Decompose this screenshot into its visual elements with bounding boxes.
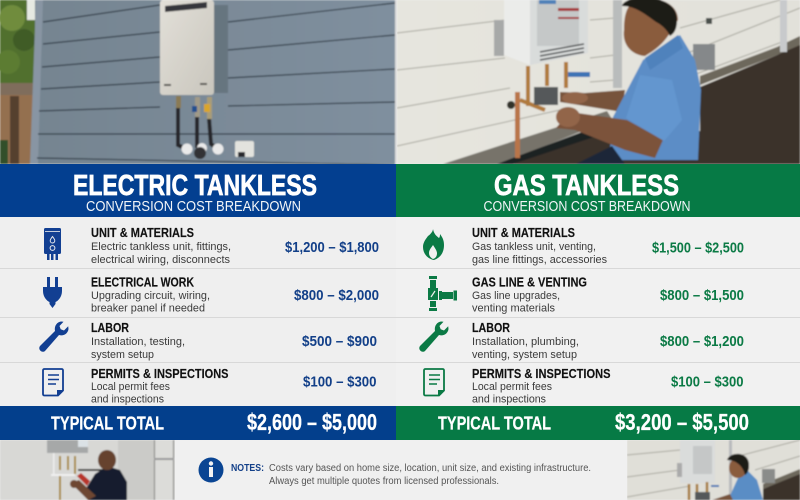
row: gas labor: $800 – $1,200 bbox=[660, 333, 744, 350]
row: electrical work bbox=[0, 269, 396, 317]
row: gas labor bbox=[396, 318, 800, 362]
icon: electric plug bbox=[43, 277, 62, 308]
row: gas line and venting bbox=[396, 269, 800, 317]
icon: gas permit document bbox=[424, 369, 444, 396]
photo: technician working on gas tankless unit bbox=[397, 0, 800, 164]
row: labor: $500 – $900 bbox=[302, 333, 377, 350]
row: permits and inspections bbox=[0, 363, 396, 406]
photo: technician indoors bbox=[0, 440, 175, 500]
row: gas unit and materials: UNIT & MATERIALS bbox=[472, 225, 575, 240]
row: gas line and venting: $800 – $1,500 bbox=[660, 287, 744, 304]
sleeve bbox=[626, 75, 682, 141]
row: labor: LABOR bbox=[91, 320, 130, 335]
icon: flame bbox=[423, 229, 444, 260]
notes text: NOTES: bbox=[231, 463, 264, 474]
row: electrical work: $800 – $2,000 bbox=[294, 287, 379, 304]
ground band under wall bbox=[443, 111, 612, 164]
row: gas labor: venting, system setup bbox=[472, 349, 577, 361]
row: gas unit and materials: gas line fittings, accessories bbox=[472, 254, 607, 266]
total bar: electric: $2,600 – $5,000 bbox=[247, 409, 377, 435]
row: gas permits and inspections: Local permit fees bbox=[472, 381, 552, 393]
row: gas line and venting: Gas line upgrades, bbox=[472, 290, 560, 302]
lower forearm and hand bbox=[556, 112, 663, 158]
row: unit and materials: UNIT & MATERIALS bbox=[91, 225, 194, 240]
shirt body bbox=[610, 35, 701, 160]
icon: info circle bbox=[198, 458, 224, 482]
notes text bbox=[231, 463, 591, 487]
heading: gas tankless: CONVERSION COST BREAKDOWN bbox=[484, 199, 690, 215]
total bar: electric bbox=[0, 406, 396, 440]
row: unit and materials: electrical wiring, disconnects bbox=[91, 254, 230, 266]
photo: electric tankless unit on siding bbox=[0, 0, 397, 165]
row: electrical work: breaker panel if needed bbox=[91, 302, 205, 314]
row: electrical work: ELECTRICAL WORK bbox=[91, 274, 194, 290]
row: unit and materials bbox=[0, 217, 396, 268]
row: labor: system setup bbox=[91, 349, 154, 361]
row: gas labor: Installation, plumbing, bbox=[472, 336, 579, 348]
icon: permit document bbox=[43, 369, 63, 396]
row: electrical work: Upgrading circuit, wiring, bbox=[91, 290, 210, 302]
row: gas unit and materials: Gas tankless unit, venting, bbox=[472, 241, 596, 253]
notes text: Always get multiple quotes from licensed professionals. bbox=[269, 476, 499, 487]
row: gas unit and materials bbox=[396, 217, 800, 268]
icon: gas pipe fitting bbox=[428, 276, 457, 311]
row: labor: Installation, testing, bbox=[91, 336, 185, 348]
panel: electric column bbox=[0, 164, 396, 440]
row: gas line and venting: GAS LINE & VENTING bbox=[472, 274, 587, 290]
heading: electric tankless bbox=[0, 164, 396, 217]
row: gas permits and inspections: PERMITS & INSPECTIONS bbox=[472, 366, 611, 381]
icon: wrench bbox=[39, 322, 68, 352]
icon: gas wrench bbox=[419, 322, 448, 352]
heading: electric tankless: ELECTRIC TANKLESS bbox=[73, 170, 317, 202]
row: permits and inspections: Local permit fees bbox=[91, 381, 170, 393]
row dividers bbox=[0, 268, 800, 362]
heading: gas tankless bbox=[396, 164, 800, 217]
icon: water heater bbox=[44, 228, 61, 260]
heading: electric tankless: CONVERSION COST BREAKDOWN bbox=[86, 199, 301, 215]
total bar: gas bbox=[396, 406, 800, 440]
row: gas labor: LABOR bbox=[472, 320, 511, 335]
row: labor bbox=[0, 318, 396, 362]
total bar: electric: TYPICAL TOTAL bbox=[51, 412, 164, 434]
row: gas permits and inspections: and inspections bbox=[472, 394, 546, 406]
row: permits and inspections: $100 – $300 bbox=[303, 374, 376, 390]
photo: technician outdoors small bbox=[627, 440, 800, 500]
row: gas permits and inspections: $100 – $300 bbox=[671, 374, 744, 390]
row: unit and materials: Electric tankless unit, fittings, bbox=[91, 241, 231, 253]
row: gas unit and materials: $1,500 – $2,500 bbox=[652, 240, 744, 256]
notes text: Costs vary based on home size, location, unit size, and existing infrastructure. bbox=[269, 463, 591, 474]
panel: gas column bbox=[396, 164, 800, 440]
heading: gas tankless: GAS TANKLESS bbox=[494, 170, 679, 202]
row: permits and inspections: PERMITS & INSPECTIONS bbox=[91, 366, 229, 381]
upper forearm bbox=[560, 90, 625, 112]
row: gas line and venting: venting materials bbox=[472, 302, 555, 314]
row: gas permits and inspections bbox=[396, 363, 800, 406]
row: unit and materials: $1,200 – $1,800 bbox=[285, 239, 379, 256]
total bar: gas: $3,200 – $5,500 bbox=[615, 409, 749, 435]
row: permits and inspections: and inspections bbox=[91, 394, 164, 406]
total bar: gas: TYPICAL TOTAL bbox=[438, 412, 551, 434]
